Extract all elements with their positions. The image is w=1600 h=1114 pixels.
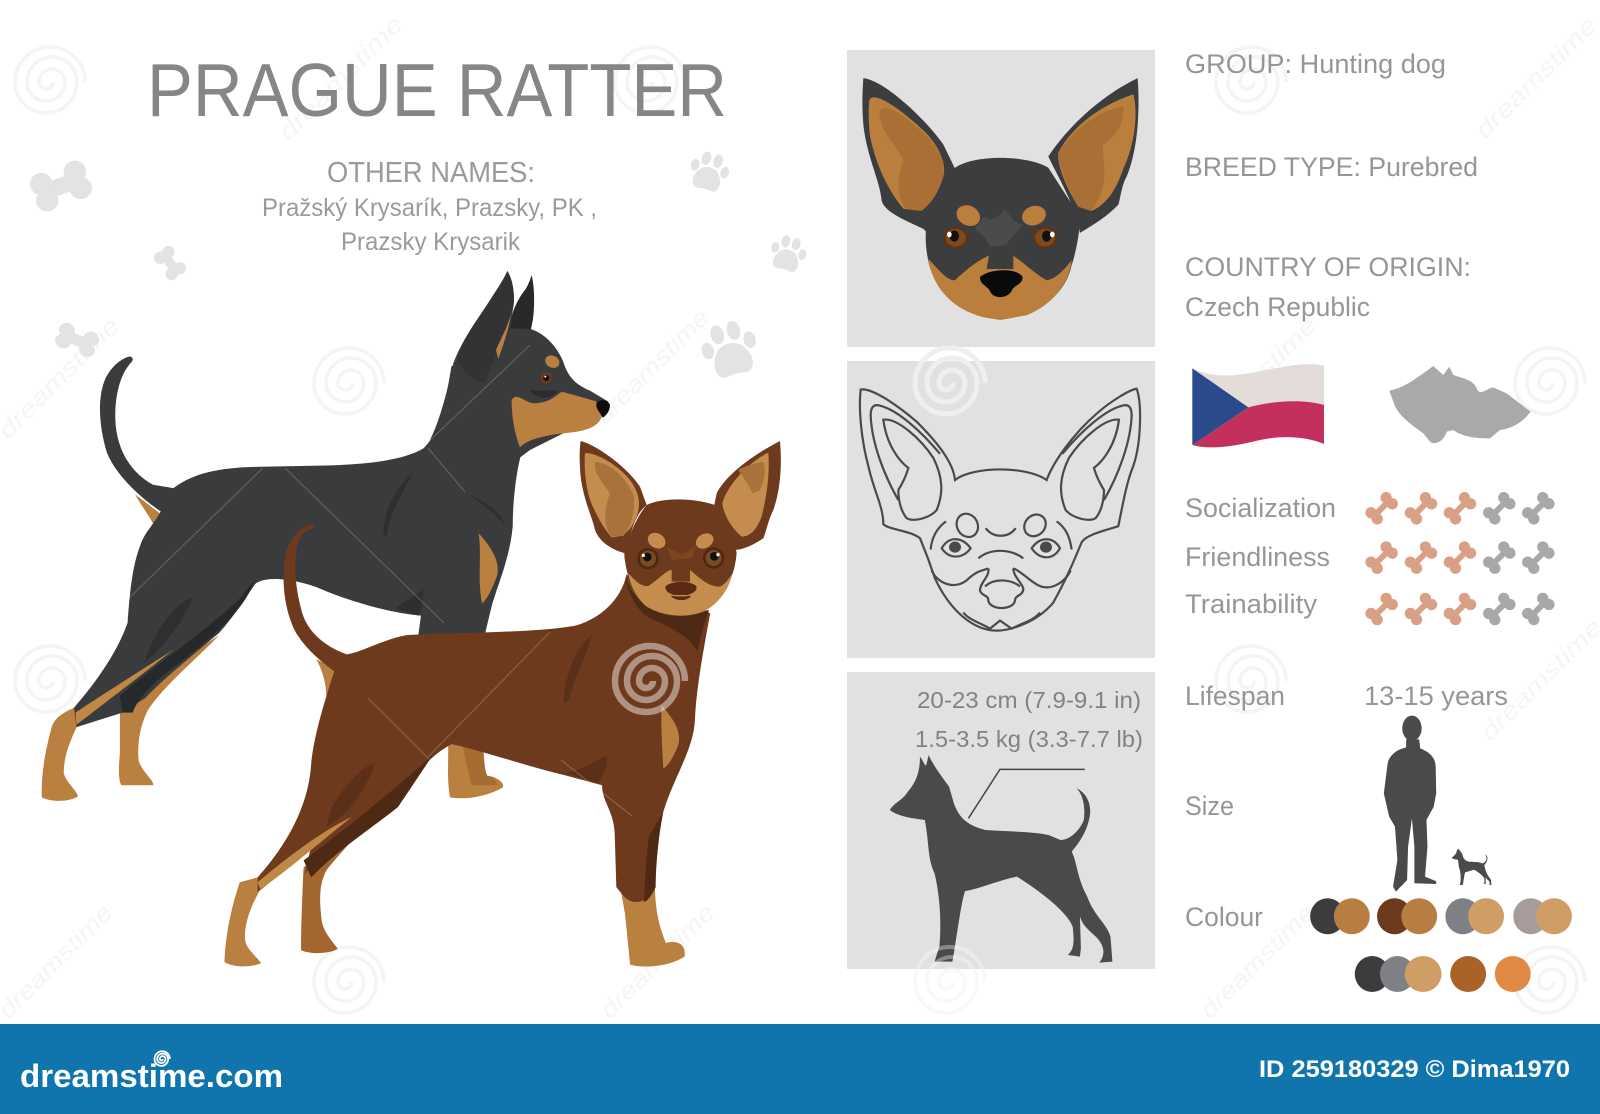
lifespan xyxy=(1185,681,1508,711)
info text block: COUNTRY OF ORIGIN: xyxy=(1185,252,1471,282)
prominent spiral over brown dog xyxy=(615,646,685,712)
watermark text: dreamstime xyxy=(1475,614,1600,746)
other names: Pražský Krysarík, Prazsky, PK , xyxy=(262,194,597,222)
height and weight text: 1.5-3.5 kg (3.3-7.7 lb) xyxy=(915,726,1143,752)
far hind leg xyxy=(119,635,219,785)
size comparison: Size xyxy=(1185,791,1234,821)
far front leg xyxy=(448,739,503,798)
info text block: GROUP: Hunting dog xyxy=(1185,49,1446,79)
icon: Czech map xyxy=(1389,366,1531,443)
info text block: BREED TYPE: Purebred xyxy=(1185,152,1478,182)
size comparison xyxy=(1185,716,1491,892)
watermark text: dreamstime xyxy=(1190,312,1322,444)
other names: Prazsky Krysarik xyxy=(341,228,520,256)
watermark text: dreamstime xyxy=(1195,899,1320,1024)
rating: friendliness xyxy=(1185,539,1557,576)
watermark text: dreamstime xyxy=(595,899,720,1024)
height and weight text: 20-23 cm (7.9-9.1 in) xyxy=(917,687,1141,713)
icon: man silhouette xyxy=(1384,716,1436,892)
watermark text: dreamstime xyxy=(273,10,409,146)
watermark text: dreamstime xyxy=(1470,12,1600,144)
far hind leg xyxy=(301,763,423,953)
footer credit: ID 259180329 © Dima1970 xyxy=(1259,1056,1570,1083)
brown and tan dog xyxy=(224,441,781,967)
footer logo: dreamstime.com xyxy=(20,1058,283,1094)
rating: trainability xyxy=(1185,589,1557,628)
height and weight text xyxy=(915,687,1143,752)
icon: small dog silhouette xyxy=(1452,848,1491,885)
info text block xyxy=(1185,49,1478,322)
near hind leg xyxy=(42,650,173,801)
near hind leg xyxy=(224,812,357,966)
colour swatches xyxy=(1185,898,1572,992)
rating: friendliness: Friendliness xyxy=(1185,542,1330,572)
lifespan: Lifespan xyxy=(1185,681,1285,711)
title: PRAGUE RATTER xyxy=(147,48,727,132)
rating: trainability: Trainability xyxy=(1185,589,1318,619)
body xyxy=(74,351,541,727)
front leg xyxy=(616,865,685,967)
watermark overlay on dogs xyxy=(128,345,632,838)
decorative bones and paws xyxy=(27,148,810,382)
body xyxy=(258,525,710,902)
info text block: Czech Republic xyxy=(1185,292,1370,322)
panel: coloured head xyxy=(847,50,1155,347)
other names xyxy=(262,157,597,256)
icon: Czech flag xyxy=(1192,364,1324,447)
colour swatches: Colour xyxy=(1185,902,1263,932)
rating: socialization xyxy=(1185,490,1557,527)
watermark text: dreamstime xyxy=(590,304,715,429)
rating: socialization: Socialization xyxy=(1185,493,1336,523)
footer bar xyxy=(0,1024,1600,1114)
lifespan: 13-15 years xyxy=(1364,681,1508,711)
panel: outline head xyxy=(847,348,1155,658)
other names: OTHER NAMES: xyxy=(327,157,535,189)
panel: size silhouette xyxy=(847,672,1155,1013)
black and tan dog xyxy=(42,271,610,801)
